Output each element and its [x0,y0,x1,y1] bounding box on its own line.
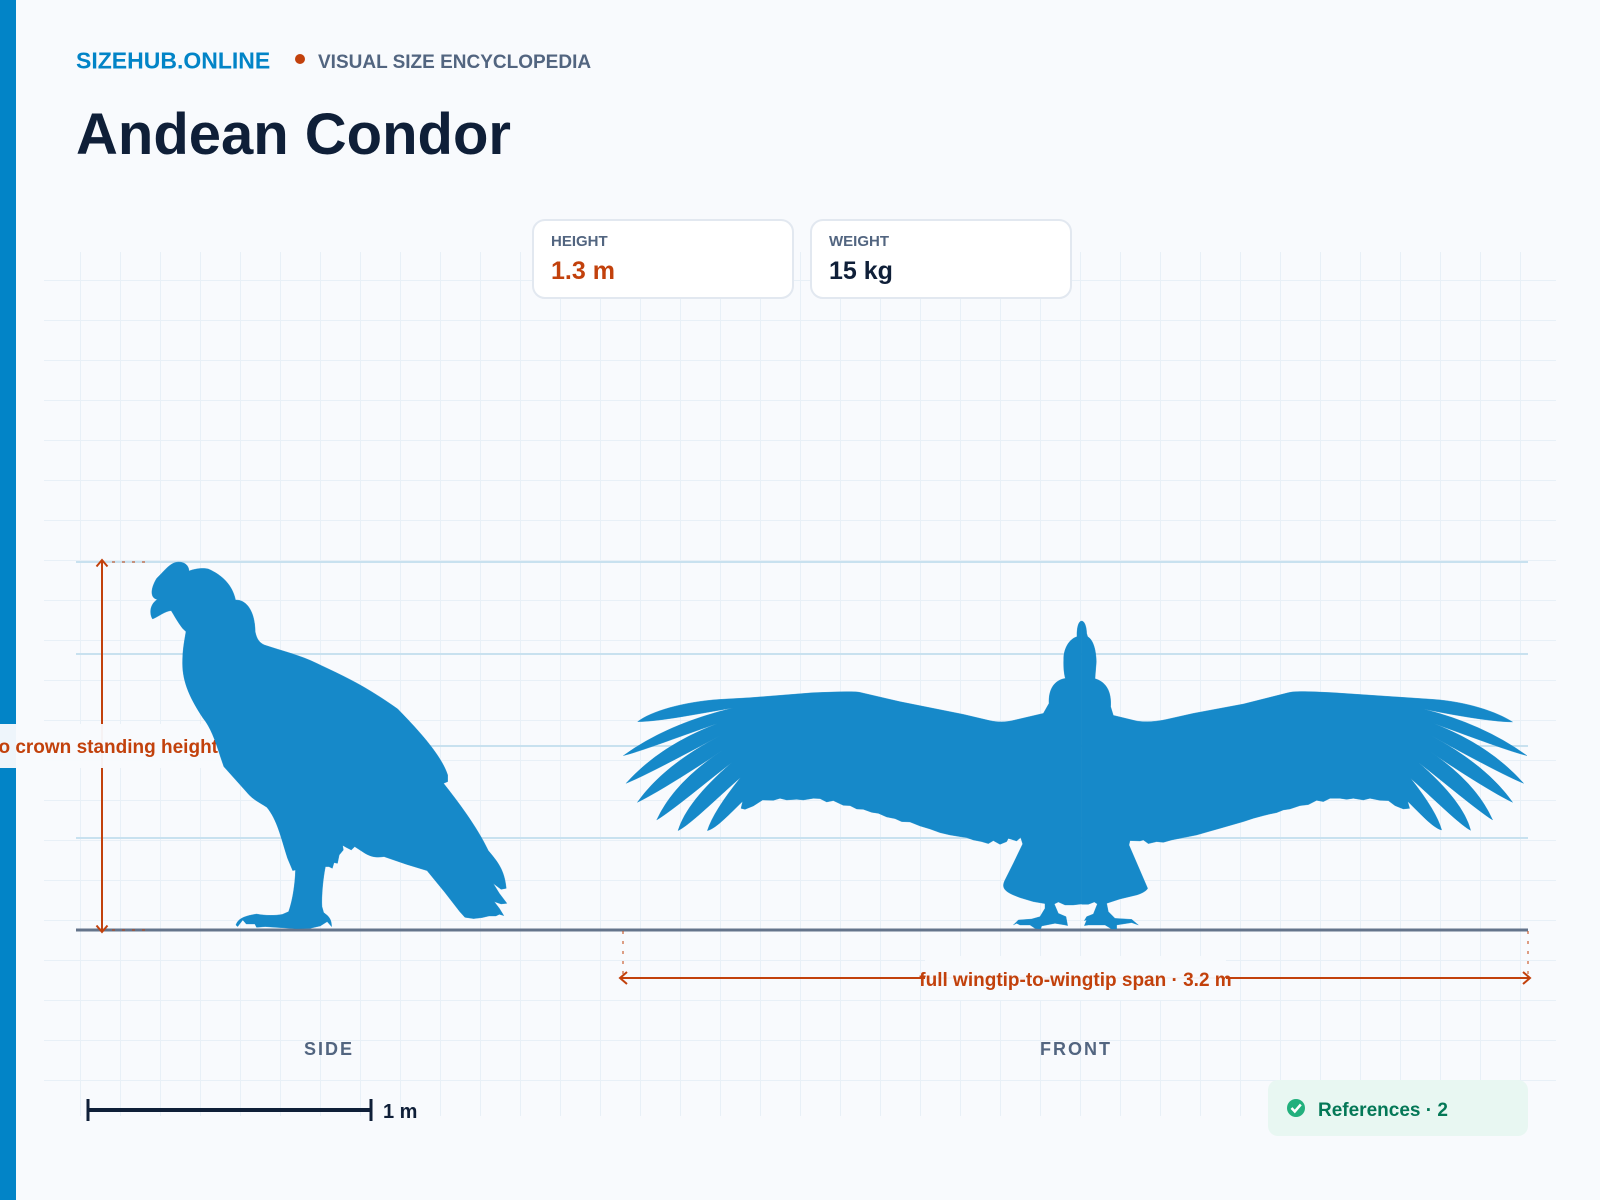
icon: check circle [1287,1099,1305,1117]
wingspan dimension label: full wingtip-to-wingtip span · 3.2 m [919,970,1232,991]
references badge [1268,1080,1528,1136]
wingspan dimension label [919,956,1232,1000]
wingspan dimension arrow [620,931,1530,984]
stat card: weight [811,220,1071,298]
view label: side: SIDE [304,1039,354,1059]
right half of front view [1082,621,1527,929]
view label: front: FRONT [1040,1039,1112,1059]
references badge: References · 2 [1318,1100,1448,1121]
background grid [44,252,1556,1116]
stat card: weight: WEIGHT [829,233,889,250]
header: dot [295,54,305,64]
title: Andean Condor [76,102,511,167]
header: brand: SIZEHUB.ONLINE [76,48,270,74]
silhouette: side view [151,562,507,929]
scale guide lines [76,561,1528,839]
height dimension label [0,724,222,768]
ground line [76,928,1528,932]
left half of front view [623,621,1082,929]
scale bar: 1 m [383,1101,417,1123]
left accent bar [0,0,16,1200]
stat card: height: HEIGHT [551,233,608,250]
stat card: height: 1.3 m [551,257,615,285]
stat card: height [533,220,793,298]
header: tagline: VISUAL SIZE ENCYCLOPEDIA [318,52,591,73]
scale bar [86,1099,417,1123]
stat card: weight: 15 kg [829,257,893,285]
height dimension arrow [96,560,148,932]
silhouette: front view [623,621,1527,929]
